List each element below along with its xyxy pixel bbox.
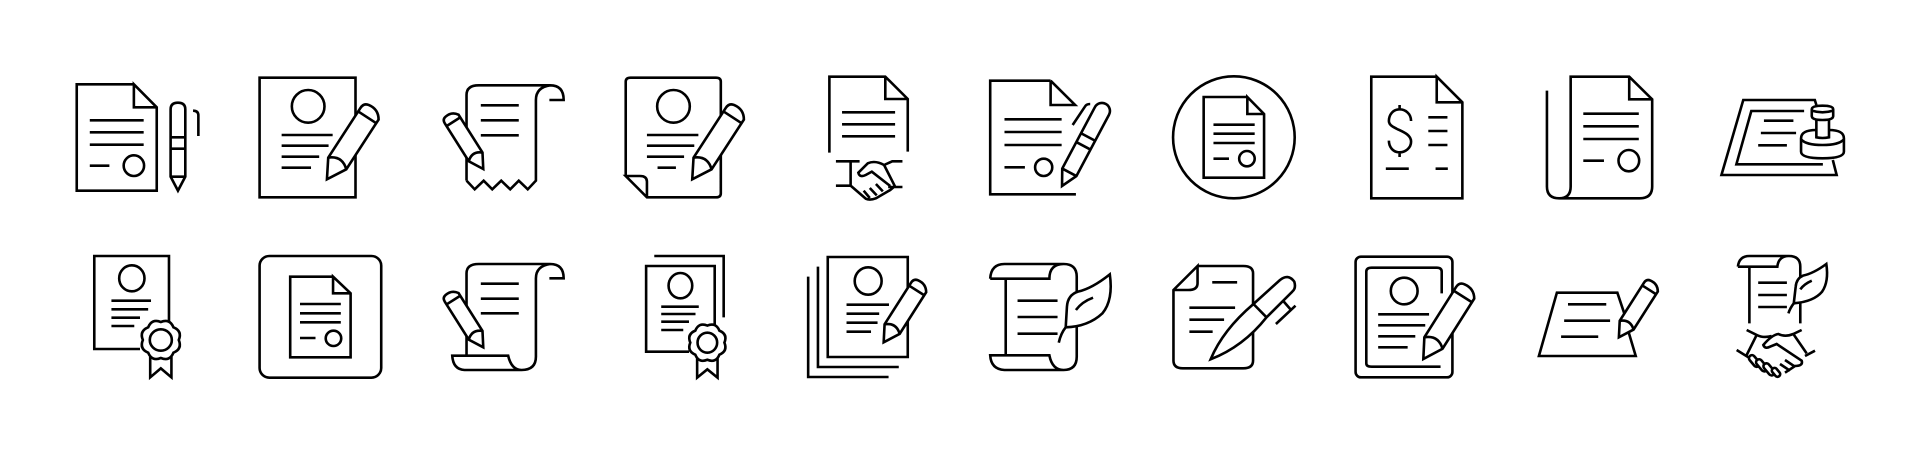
paper	[1539, 293, 1636, 356]
handshake	[1737, 330, 1815, 378]
icon: document in rounded square	[260, 256, 381, 378]
photo circle	[855, 267, 882, 295]
icon: note with fountain pen	[1173, 266, 1296, 368]
sheet	[94, 256, 169, 349]
rosette	[689, 325, 725, 361]
icon: paper scroll with pencil	[442, 264, 564, 370]
icon: curled document	[1547, 77, 1652, 198]
note sheet	[1173, 266, 1253, 368]
text lines	[1018, 301, 1058, 334]
icon: scroll with quill feather	[990, 264, 1111, 370]
curled sheet	[1547, 77, 1652, 198]
rosette	[142, 321, 180, 359]
pen	[1055, 100, 1113, 190]
icon: stacked profile documents with pencil	[808, 257, 929, 377]
text lines and seal	[1213, 125, 1255, 159]
icon: scroll, feather and handshake	[1737, 256, 1827, 378]
circle frame	[1173, 76, 1295, 198]
scroll	[452, 264, 564, 370]
pencil	[442, 288, 490, 352]
text lines	[111, 301, 151, 326]
pencil	[683, 102, 748, 185]
sheets	[646, 256, 724, 352]
text lines	[481, 284, 519, 313]
ribbon	[697, 358, 718, 378]
text lines	[647, 135, 698, 168]
text lines	[1561, 304, 1610, 337]
feather vein and quill	[1059, 298, 1093, 343]
pencil	[318, 102, 382, 185]
icon: paper on desk with pencil	[1539, 278, 1661, 356]
document	[290, 277, 351, 357]
sheet	[260, 78, 356, 197]
text lines and seal	[1583, 114, 1639, 161]
scroll	[990, 264, 1077, 370]
feather	[1066, 274, 1111, 327]
text lines and seal	[300, 304, 341, 338]
pencil	[1612, 278, 1661, 342]
icon: invoice with dollar sign	[1371, 77, 1462, 198]
document	[990, 81, 1076, 194]
icon: certificate stack with rosette	[646, 256, 725, 378]
inner sheet	[1366, 268, 1442, 367]
icon: document in circle	[1173, 76, 1295, 198]
text lines	[481, 105, 519, 135]
document	[1204, 97, 1264, 178]
document	[829, 77, 908, 153]
pencil	[876, 278, 929, 347]
photo circle	[1391, 278, 1418, 304]
outer frame	[1356, 257, 1452, 377]
receipt	[467, 85, 564, 189]
text lines	[661, 307, 699, 330]
icon: profile document with pencil	[260, 78, 382, 197]
icon: framed profile document with pencil	[1356, 257, 1478, 377]
text lines	[282, 135, 333, 168]
text lines	[1758, 121, 1796, 145]
stamp	[1801, 106, 1844, 158]
ribbon	[150, 357, 171, 377]
icon: document with slanted pen	[990, 81, 1113, 194]
text lines and seal	[90, 120, 144, 166]
document	[1371, 77, 1462, 198]
pen	[1211, 277, 1295, 359]
document sheet	[77, 84, 157, 191]
text lines and seal	[1004, 119, 1062, 167]
icon: receipt scroll with pencil	[442, 85, 564, 189]
text lines	[1386, 117, 1448, 169]
photo circle	[292, 90, 324, 123]
pen	[171, 103, 198, 191]
sheet	[626, 78, 721, 197]
text lines	[847, 305, 889, 332]
stacked sheets	[808, 267, 899, 377]
icon: document with handshake	[829, 77, 908, 200]
rounded frame	[260, 256, 381, 378]
icon: document with pen	[77, 84, 198, 191]
text lines	[1378, 314, 1429, 347]
icon: document with rubber stamp	[1721, 100, 1844, 175]
handshake	[836, 161, 902, 200]
text lines	[1189, 282, 1237, 332]
scroll with feather	[1738, 256, 1827, 323]
icon: certificate with rosette	[94, 256, 180, 377]
photo circle	[669, 273, 692, 298]
dollar sign	[1389, 105, 1411, 157]
pen band and clip	[1253, 301, 1296, 324]
photo circle	[119, 265, 144, 291]
pencil	[1414, 281, 1478, 365]
paper	[1721, 100, 1837, 175]
pen clip	[1073, 104, 1090, 125]
pencil	[442, 110, 490, 173]
icon: folded corner profile document with pencil	[626, 78, 748, 197]
photo circle	[657, 90, 690, 123]
text lines	[842, 112, 895, 136]
